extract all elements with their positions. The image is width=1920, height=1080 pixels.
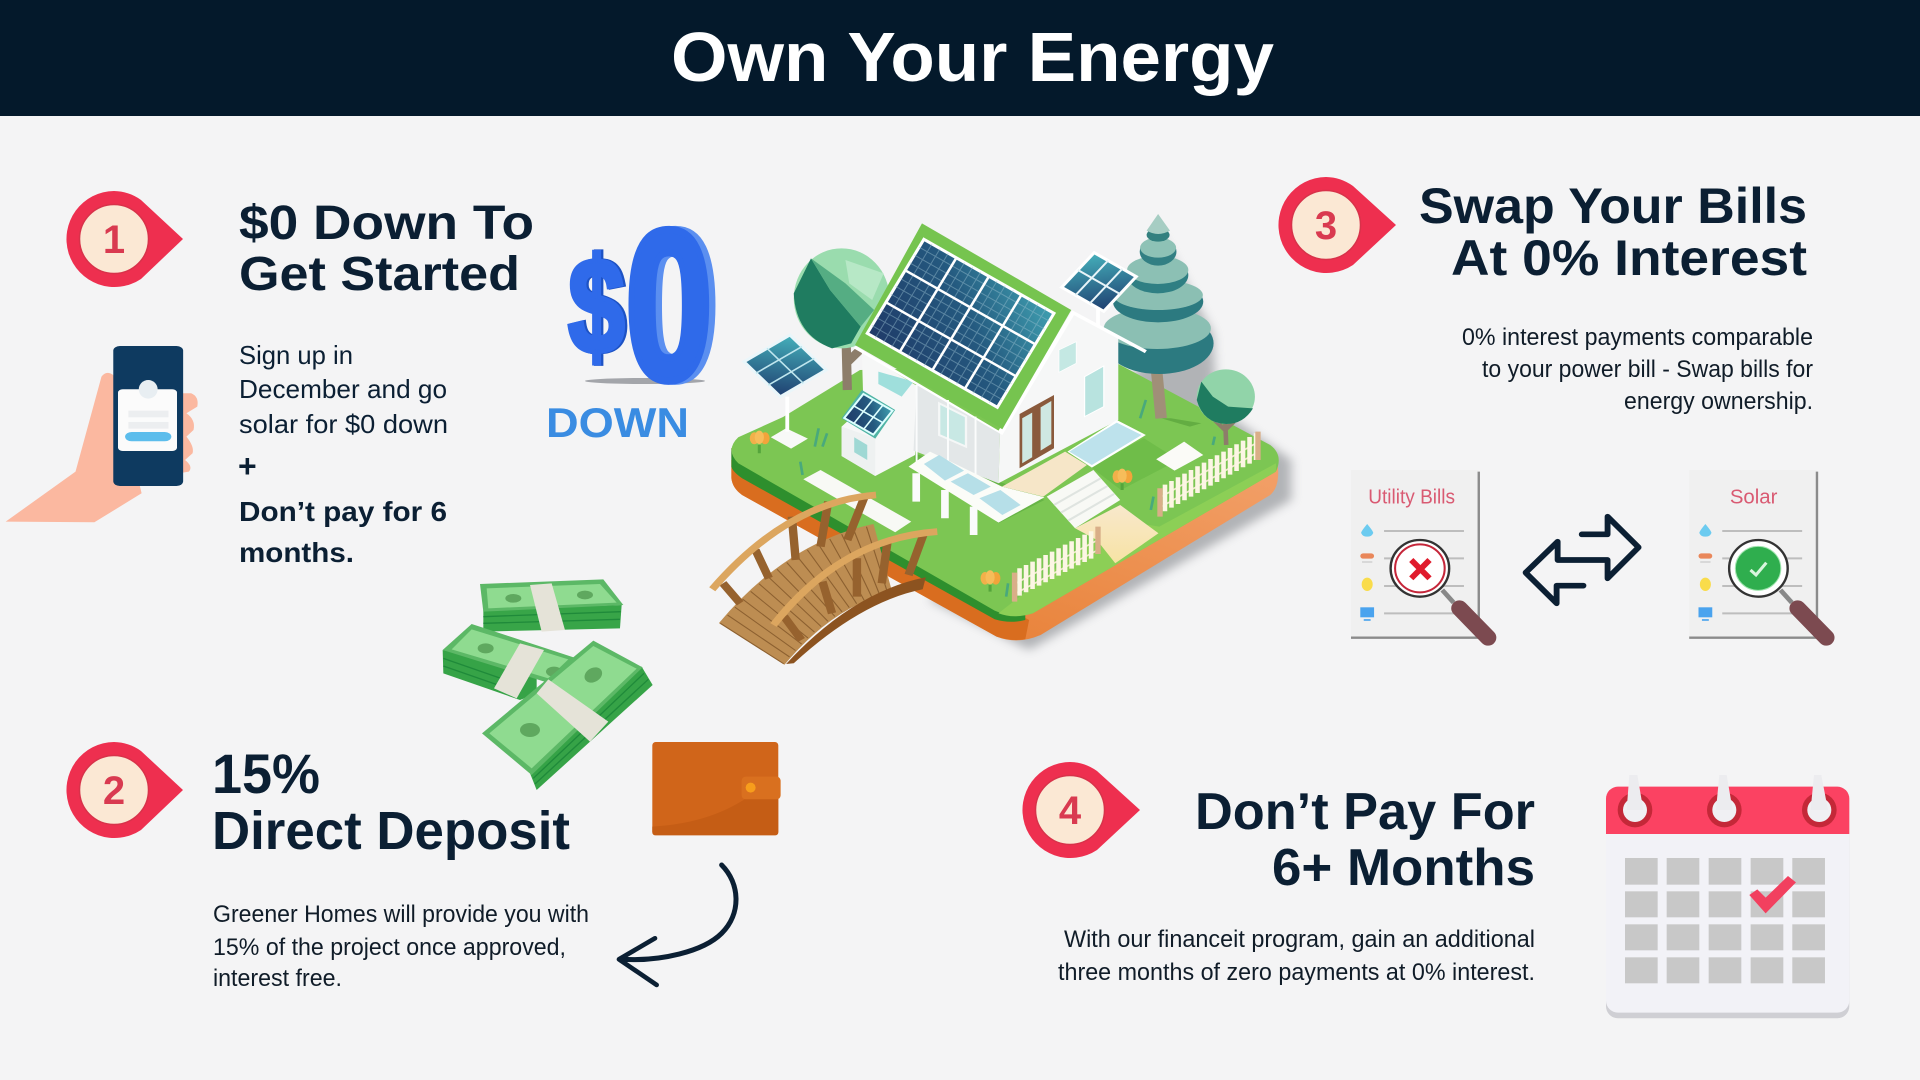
- icon: number pin 3: 3: [1315, 204, 1337, 248]
- heading: step 1: [239, 197, 534, 301]
- heading: step 3: Swap Your Bills: [1419, 178, 1807, 234]
- arrows: swap: [1526, 517, 1639, 603]
- text: step 2 body: [213, 901, 589, 992]
- solar panel: freestanding left: [744, 335, 826, 449]
- text: step 1 body: +: [238, 448, 257, 484]
- heading: step 2: [212, 742, 570, 861]
- arrow: curved to text: [619, 865, 736, 985]
- icon: 3D zero dollars: 0: [631, 186, 719, 425]
- panel: step 1: [6, 186, 719, 568]
- fence: front: [1015, 527, 1098, 602]
- platform shadow: [930, 233, 1291, 650]
- text: step 1 body: December and go: [239, 374, 447, 404]
- title: Own Your Energy: [671, 18, 1274, 96]
- text: step 3 body: to your power bill - Swap bills for: [1482, 356, 1813, 383]
- fence: right: [1158, 432, 1259, 517]
- heading: step 2: 15%: [212, 742, 320, 805]
- text: step 4 body: [1058, 926, 1535, 986]
- heading: step 3: [1419, 178, 1807, 286]
- bridge: [712, 495, 937, 664]
- icon: utility bill with red x: Utility Bills: [1368, 486, 1455, 508]
- text: step 4 body: With our financeit program, gain an additional: [1064, 926, 1535, 953]
- icon: 3D zero dollars: [546, 186, 719, 446]
- panel: step 3: [1278, 177, 1826, 638]
- icon: 3D zero dollars: 0: [625, 186, 713, 425]
- text: step 1 body: [238, 340, 448, 568]
- header band: [0, 0, 1920, 116]
- flowers: [750, 431, 1132, 592]
- icon: calendar: [1606, 775, 1849, 1018]
- icon: wallet: [652, 742, 781, 835]
- house: [842, 312, 1158, 563]
- heading: step 2: Direct Deposit: [212, 801, 570, 861]
- icon: number pin 1: 1: [103, 218, 125, 262]
- icon: 3D zero dollars: $: [570, 231, 627, 382]
- panel: step 2: [66, 579, 781, 992]
- icon: number pin 2: 2: [103, 769, 125, 813]
- heading: step 4: 6+ Months: [1272, 839, 1535, 897]
- roof with solar array: [842, 223, 1075, 439]
- icon: number pin 4: [1022, 762, 1140, 858]
- text: step 1 body: solar for $0 down: [239, 409, 448, 439]
- icon: solar bill with green check: [1689, 470, 1826, 638]
- icon: solar bill with green check: Solar: [1730, 486, 1777, 508]
- solar panel: freestanding right: [1062, 253, 1136, 327]
- icon: utility bill with red x: [1351, 470, 1488, 638]
- text: step 2 body: Greener Homes will provide you with: [213, 901, 589, 928]
- heading: step 3: At 0% Interest: [1451, 230, 1807, 286]
- text: step 1 body: months.: [239, 537, 354, 568]
- icon: money stacks: [443, 579, 653, 790]
- text: step 3 body: energy ownership.: [1624, 388, 1813, 415]
- icon: 3D zero dollars: $: [568, 231, 625, 382]
- icon: number pin 3: [1278, 177, 1396, 273]
- tree: pine: [1104, 214, 1214, 418]
- illustration: isometric solar house: [712, 214, 1291, 664]
- text: step 2 body: interest free.: [213, 965, 342, 992]
- icon: number pin 2: [66, 742, 183, 838]
- text: step 4 body: three months of zero payments at 0% interest.: [1058, 959, 1535, 986]
- text: step 1 body: Don’t pay for 6: [239, 496, 447, 527]
- porch deck: [909, 420, 1158, 563]
- panel: step 4: [1022, 762, 1849, 1018]
- text: step 2 body: 15% of the project once approved,: [213, 934, 566, 961]
- tree: left round: [794, 248, 889, 390]
- text: step 1 body: Sign up in: [239, 340, 353, 370]
- garden details: [750, 400, 1259, 602]
- icon: number pin 4: 4: [1059, 789, 1082, 833]
- icon: hand holding phone: [6, 346, 198, 522]
- icon: number pin 1: [66, 191, 183, 287]
- heading: step 1: Get Started: [239, 248, 520, 301]
- tree: small right: [1197, 369, 1255, 445]
- heading: step 4: Don’t Pay For: [1195, 783, 1535, 841]
- text: step 3 body: [1462, 324, 1813, 415]
- text: step 3 body: 0% interest payments comparable: [1462, 324, 1813, 351]
- heading: step 4: [1195, 783, 1535, 897]
- label: down: DOWN: [546, 399, 689, 446]
- heading: step 1: $0 Down To: [239, 197, 534, 250]
- island platform: [731, 363, 1279, 640]
